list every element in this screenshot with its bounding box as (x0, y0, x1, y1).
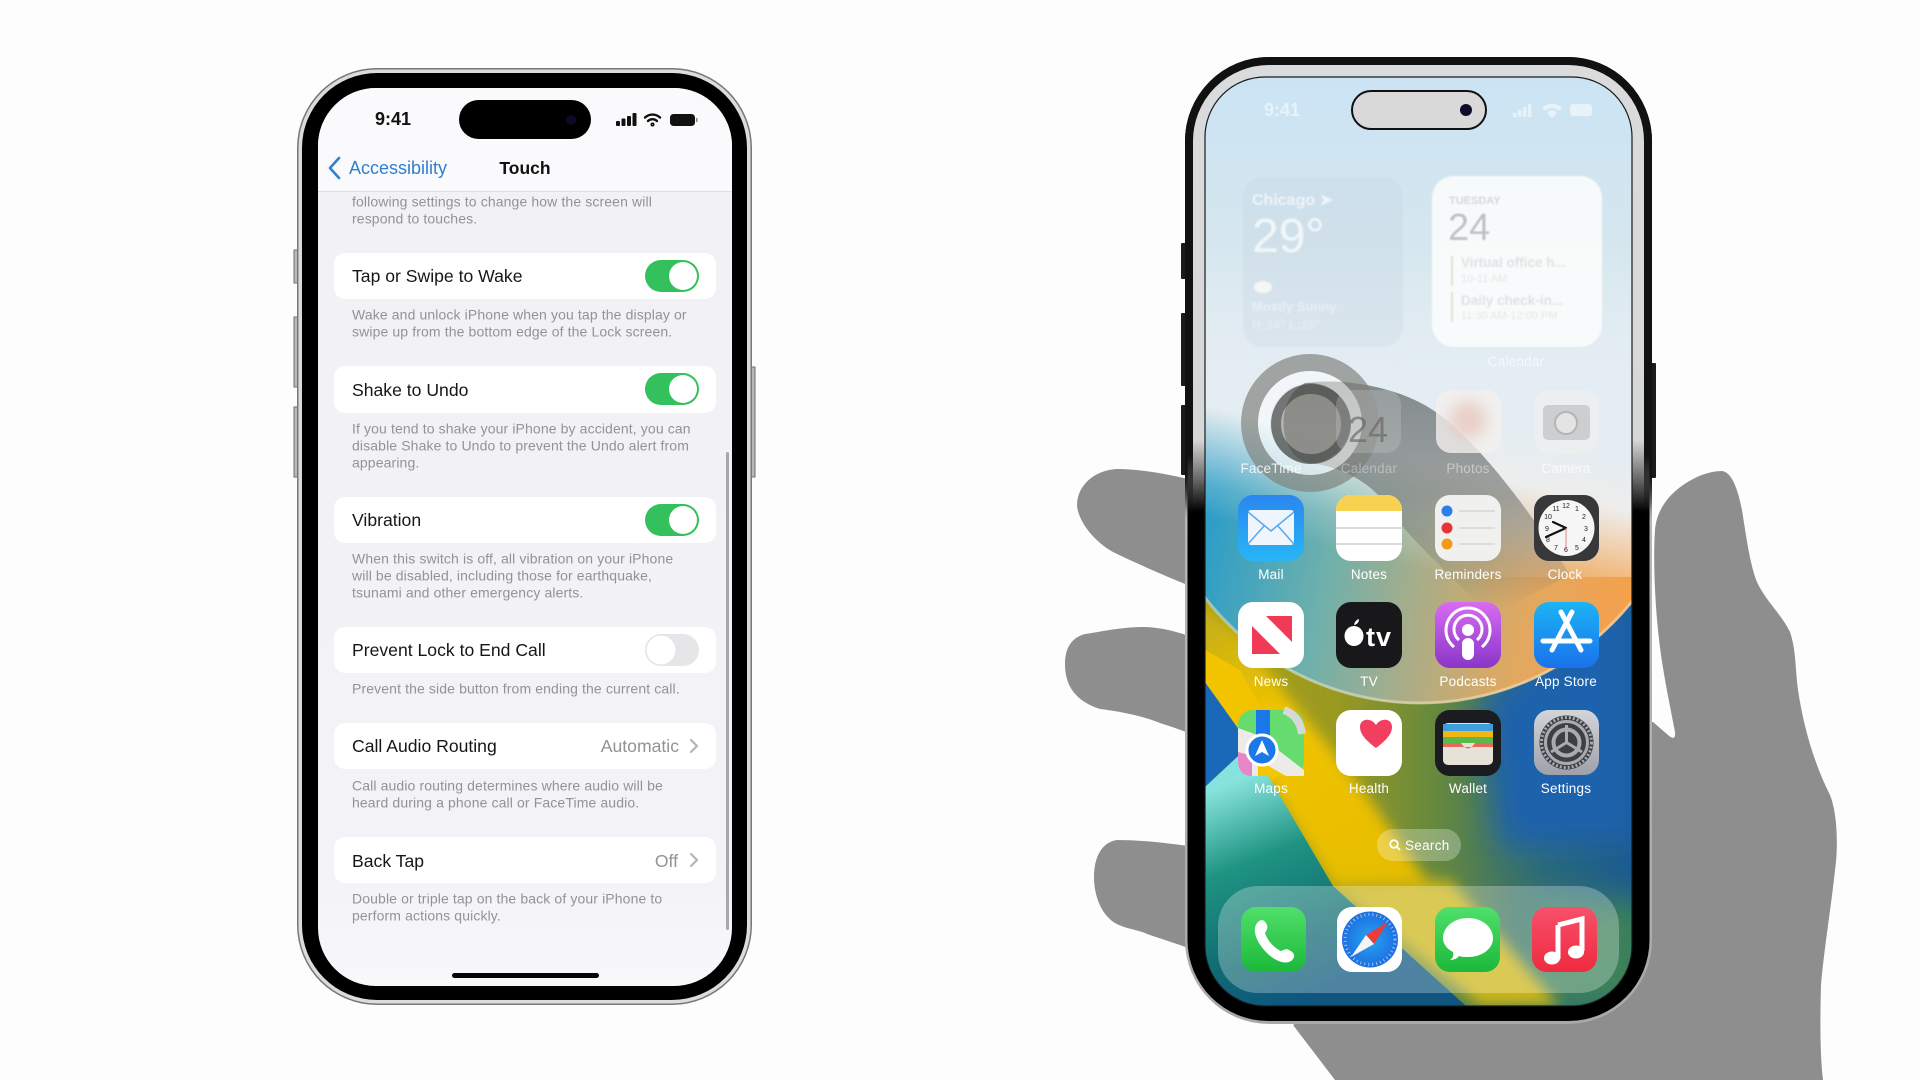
label: Reminders: Reminders (1434, 567, 1502, 582)
app: News (1238, 602, 1304, 668)
card: Call Audio Routing: Call Audio Routing (352, 736, 497, 756)
weather widget (1243, 177, 1403, 347)
app: Phone (1241, 907, 1306, 972)
app: Clock: 7 (1554, 545, 1558, 552)
app: Clock: 8 (1546, 537, 1550, 544)
app: Wallet (1435, 710, 1501, 776)
app: Clock: 12 (1562, 503, 1570, 510)
description: call audio: heard during a phone call or FaceTime audio. (352, 794, 639, 810)
phone: home screen with touch indicator (1181, 57, 1656, 1024)
phone: Touch settings screen (294, 68, 755, 1005)
card: Shake to Undo: Shake to Undo (352, 380, 469, 400)
app: Safari (1337, 907, 1402, 972)
app: Clock: 1 (1575, 506, 1579, 513)
card: Vibration (334, 497, 716, 543)
app: Clock: 10 (1544, 514, 1552, 521)
app: Maps (1238, 710, 1304, 776)
label: Notes: Notes (1351, 567, 1387, 582)
app: Clock: 6 (1564, 547, 1568, 554)
FaceTime label: FaceTime (1240, 461, 1302, 476)
description: back tap: Double or triple tap on the back of your iPhone to (352, 890, 662, 906)
time: 9:41 (375, 109, 411, 129)
card: Call Audio Routing: Automatic (601, 736, 679, 756)
card: Call Audio Routing (334, 723, 716, 769)
touch indicator rings (1250, 362, 1370, 484)
scrollbar (726, 452, 729, 930)
dock (1218, 886, 1619, 993)
wallpaper (1206, 78, 1632, 1006)
description: wake: swipe up from the bottom edge of the Lock screen. (352, 324, 672, 340)
intro description: respond to touches. (352, 210, 477, 226)
card: Prevent Lock to End Call: Prevent Lock to End Call (352, 640, 546, 660)
description: shake: disable Shake to Undo to prevent the Undo alert from (352, 438, 689, 454)
label: App Store: App Store (1535, 674, 1597, 689)
phone frame (1185, 57, 1652, 1024)
app: Messages (1435, 907, 1500, 972)
calendar app (1336, 390, 1401, 476)
status bar (1264, 100, 1592, 120)
intro description: following settings to change how the screen will (352, 194, 652, 210)
description: vibration: tsunami and other emergency alerts. (352, 584, 583, 600)
faded app row (1240, 390, 1599, 476)
calendar app: 24 (1348, 409, 1388, 450)
phone frame (297, 68, 752, 1005)
screen title: Touch (499, 158, 551, 178)
app: Clock: 5 (1575, 545, 1579, 552)
weather widget: H:34° L:26° (1252, 317, 1321, 332)
calendar widget: 24 (1448, 207, 1490, 249)
app: Clock: 9 (1545, 526, 1549, 533)
card: Tap or Swipe to Wake: Tap or Swipe to Wake (352, 266, 522, 286)
signal (616, 113, 636, 126)
calendar widget: TUESDAY (1449, 195, 1501, 207)
hand silhouette (1065, 469, 1837, 1080)
card: Vibration: Vibration (352, 510, 421, 530)
card: Shake to Undo (334, 366, 716, 413)
label: News: News (1254, 674, 1288, 689)
weather widget: Mostly Sunny (1252, 299, 1337, 314)
dynamic island (459, 100, 591, 139)
app: Health (1336, 710, 1402, 776)
status bar (375, 100, 698, 139)
dynamic island outline (1352, 91, 1486, 129)
calendar widget: 11:30 AM-12:00 PM (1461, 310, 1557, 322)
description: back tap: perform actions quickly. (352, 908, 501, 924)
side buttons (1181, 243, 1656, 478)
description: vibration: When this switch is off, all vibration on your iPhone (352, 550, 673, 566)
side buttons (294, 250, 755, 477)
weather widget: 29° (1252, 210, 1325, 263)
wifi (645, 115, 660, 125)
widget label: Calendar (1488, 354, 1544, 369)
card: Back Tap: Off (655, 851, 678, 871)
app: Music (1532, 907, 1597, 972)
navigation bar background (318, 88, 732, 191)
app: App Store (1534, 602, 1599, 668)
app: Clock (1534, 495, 1599, 561)
search pill: Search (1405, 838, 1450, 853)
app: TV: tv (1366, 622, 1392, 652)
description: prevent lock: Prevent the side button from ending the current call. (352, 680, 680, 696)
photos app: Photos (1446, 461, 1490, 476)
description: vibration: will be disabled, including those for earthquake, (351, 568, 652, 584)
card: Prevent Lock to End Call (334, 627, 716, 673)
signal, wifi and battery (1513, 104, 1592, 118)
card: Tap or Swipe to Wake (334, 253, 716, 299)
label: Clock: Clock (1548, 567, 1582, 582)
label: Settings: Settings (1541, 781, 1591, 796)
app: Clock: 11 (1552, 506, 1560, 513)
camera app (1534, 390, 1599, 476)
label: Mail: Mail (1258, 567, 1284, 582)
search pill (1377, 829, 1461, 861)
app: Clock: 3 (1584, 526, 1588, 533)
description: shake: appearing. (352, 454, 419, 470)
app: Clock: 4 (1582, 537, 1586, 544)
app: Settings (1534, 710, 1599, 775)
app: TV (1336, 602, 1402, 668)
calendar widget: 10-11 AM (1461, 273, 1507, 285)
calendar app: Calendar (1341, 461, 1397, 476)
app: Mail (1238, 495, 1304, 561)
time: 9:41 (1264, 100, 1300, 120)
app: Clock: 2 (1582, 514, 1586, 521)
label: Maps: Maps (1254, 781, 1288, 796)
battery (670, 114, 698, 126)
thumb translucent overlay (1284, 382, 1570, 615)
app: Reminders (1435, 495, 1501, 561)
app: Notes (1336, 495, 1402, 561)
label: TV: TV (1360, 674, 1378, 689)
label: Wallet: Wallet (1449, 781, 1487, 796)
photos app (1436, 390, 1501, 476)
description: wake: Wake and unlock iPhone when you tap the display or (352, 306, 687, 322)
screen (318, 88, 732, 986)
calendar widget (1432, 176, 1602, 347)
calendar widget: Daily check-in... (1461, 293, 1563, 308)
card: Back Tap: Back Tap (352, 851, 424, 871)
description: shake: If you tend to shake your iPhone by accident, you can (352, 420, 691, 436)
camera app: Camera (1541, 461, 1591, 476)
label: Health: Health (1349, 781, 1389, 796)
label: Podcasts: Podcasts (1439, 674, 1497, 689)
screen outline (1205, 77, 1632, 1006)
description: call audio: Call audio routing determines where audio will be (352, 778, 663, 794)
home indicator (452, 973, 599, 978)
calendar widget: Virtual office h... (1461, 255, 1566, 270)
card: Back Tap (334, 837, 716, 883)
back link: Accessibility (349, 158, 447, 178)
app: Podcasts (1435, 602, 1501, 668)
weather widget: Chicago ➤ (1252, 192, 1334, 209)
